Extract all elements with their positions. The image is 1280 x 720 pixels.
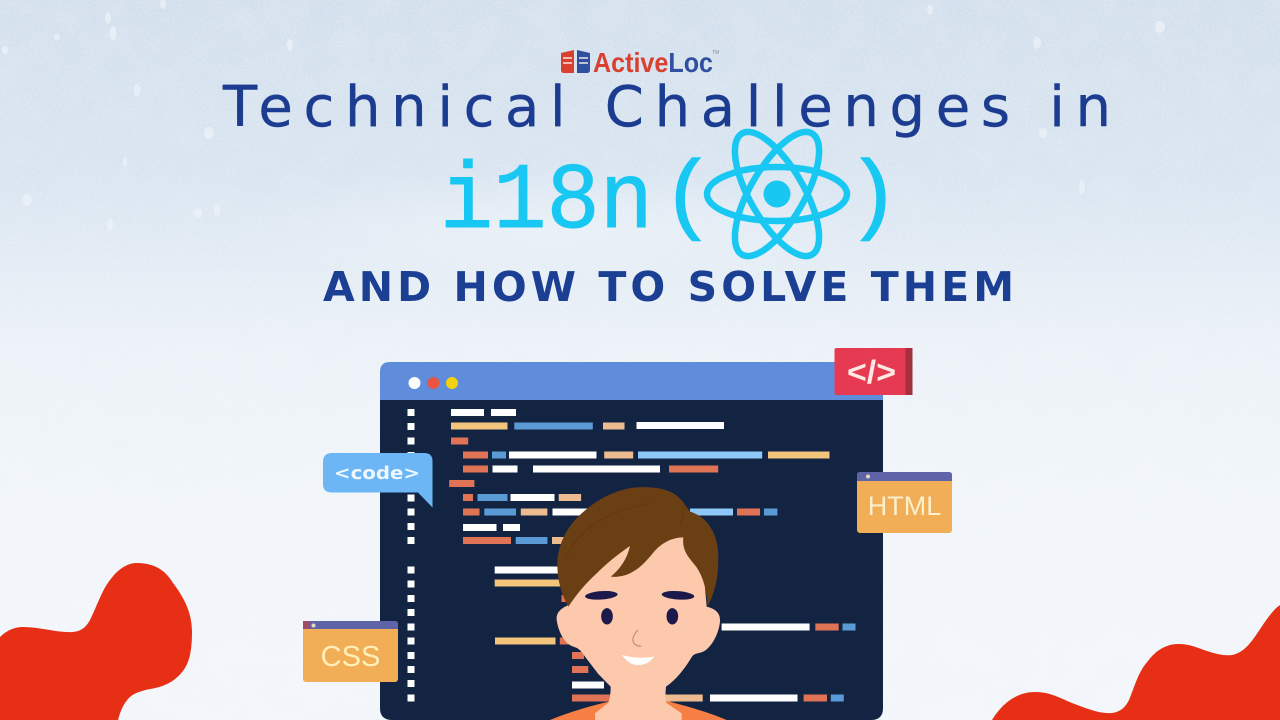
title line 1: Technical Challenges in — [222, 75, 1111, 140]
tag: closing code symbol — [834, 348, 912, 395]
window control dots — [408, 377, 458, 389]
subtitle: AND HOW TO SOLVE THEM — [323, 263, 1014, 311]
hair shading — [565, 503, 684, 560]
right eye — [666, 608, 678, 624]
window title bar — [380, 362, 883, 400]
closing parenthesis: ) — [861, 142, 890, 241]
right eyebrow — [661, 590, 695, 601]
red blob: bottom left — [0, 563, 192, 720]
face and neck — [557, 530, 720, 720]
hair — [557, 487, 718, 607]
left eyebrow — [585, 590, 618, 601]
trademark: TM — [712, 50, 719, 56]
shirt — [550, 701, 727, 720]
i18n text: i18n — [440, 150, 653, 256]
tag: HTML: HTML — [868, 491, 941, 521]
line number markers — [408, 409, 414, 702]
background: icy snow texture — [0, 0, 1280, 302]
nose — [633, 630, 641, 646]
left eye — [601, 608, 613, 624]
mouth — [622, 655, 654, 665]
icon: React atom — [707, 120, 847, 268]
logo: ActiveLoc — [561, 47, 719, 78]
opening parenthesis: ( — [671, 142, 700, 241]
title line 2: i18n with React logo — [440, 120, 890, 268]
tag: CSS — [303, 621, 398, 682]
code editor window — [380, 362, 883, 720]
speech bubble: code — [323, 453, 432, 508]
code lines — [449, 409, 856, 702]
developer character — [550, 487, 727, 720]
icon: open book — [561, 50, 590, 73]
tag: closing code symbol: </> — [847, 354, 896, 390]
tag: CSS: CSS — [321, 641, 380, 673]
tag: HTML — [857, 472, 952, 533]
red blob: bottom right — [992, 605, 1280, 720]
speech bubble: code: <code> — [334, 463, 420, 484]
logo wordmark: ActiveLoc — [593, 47, 713, 78]
window body — [380, 400, 883, 720]
